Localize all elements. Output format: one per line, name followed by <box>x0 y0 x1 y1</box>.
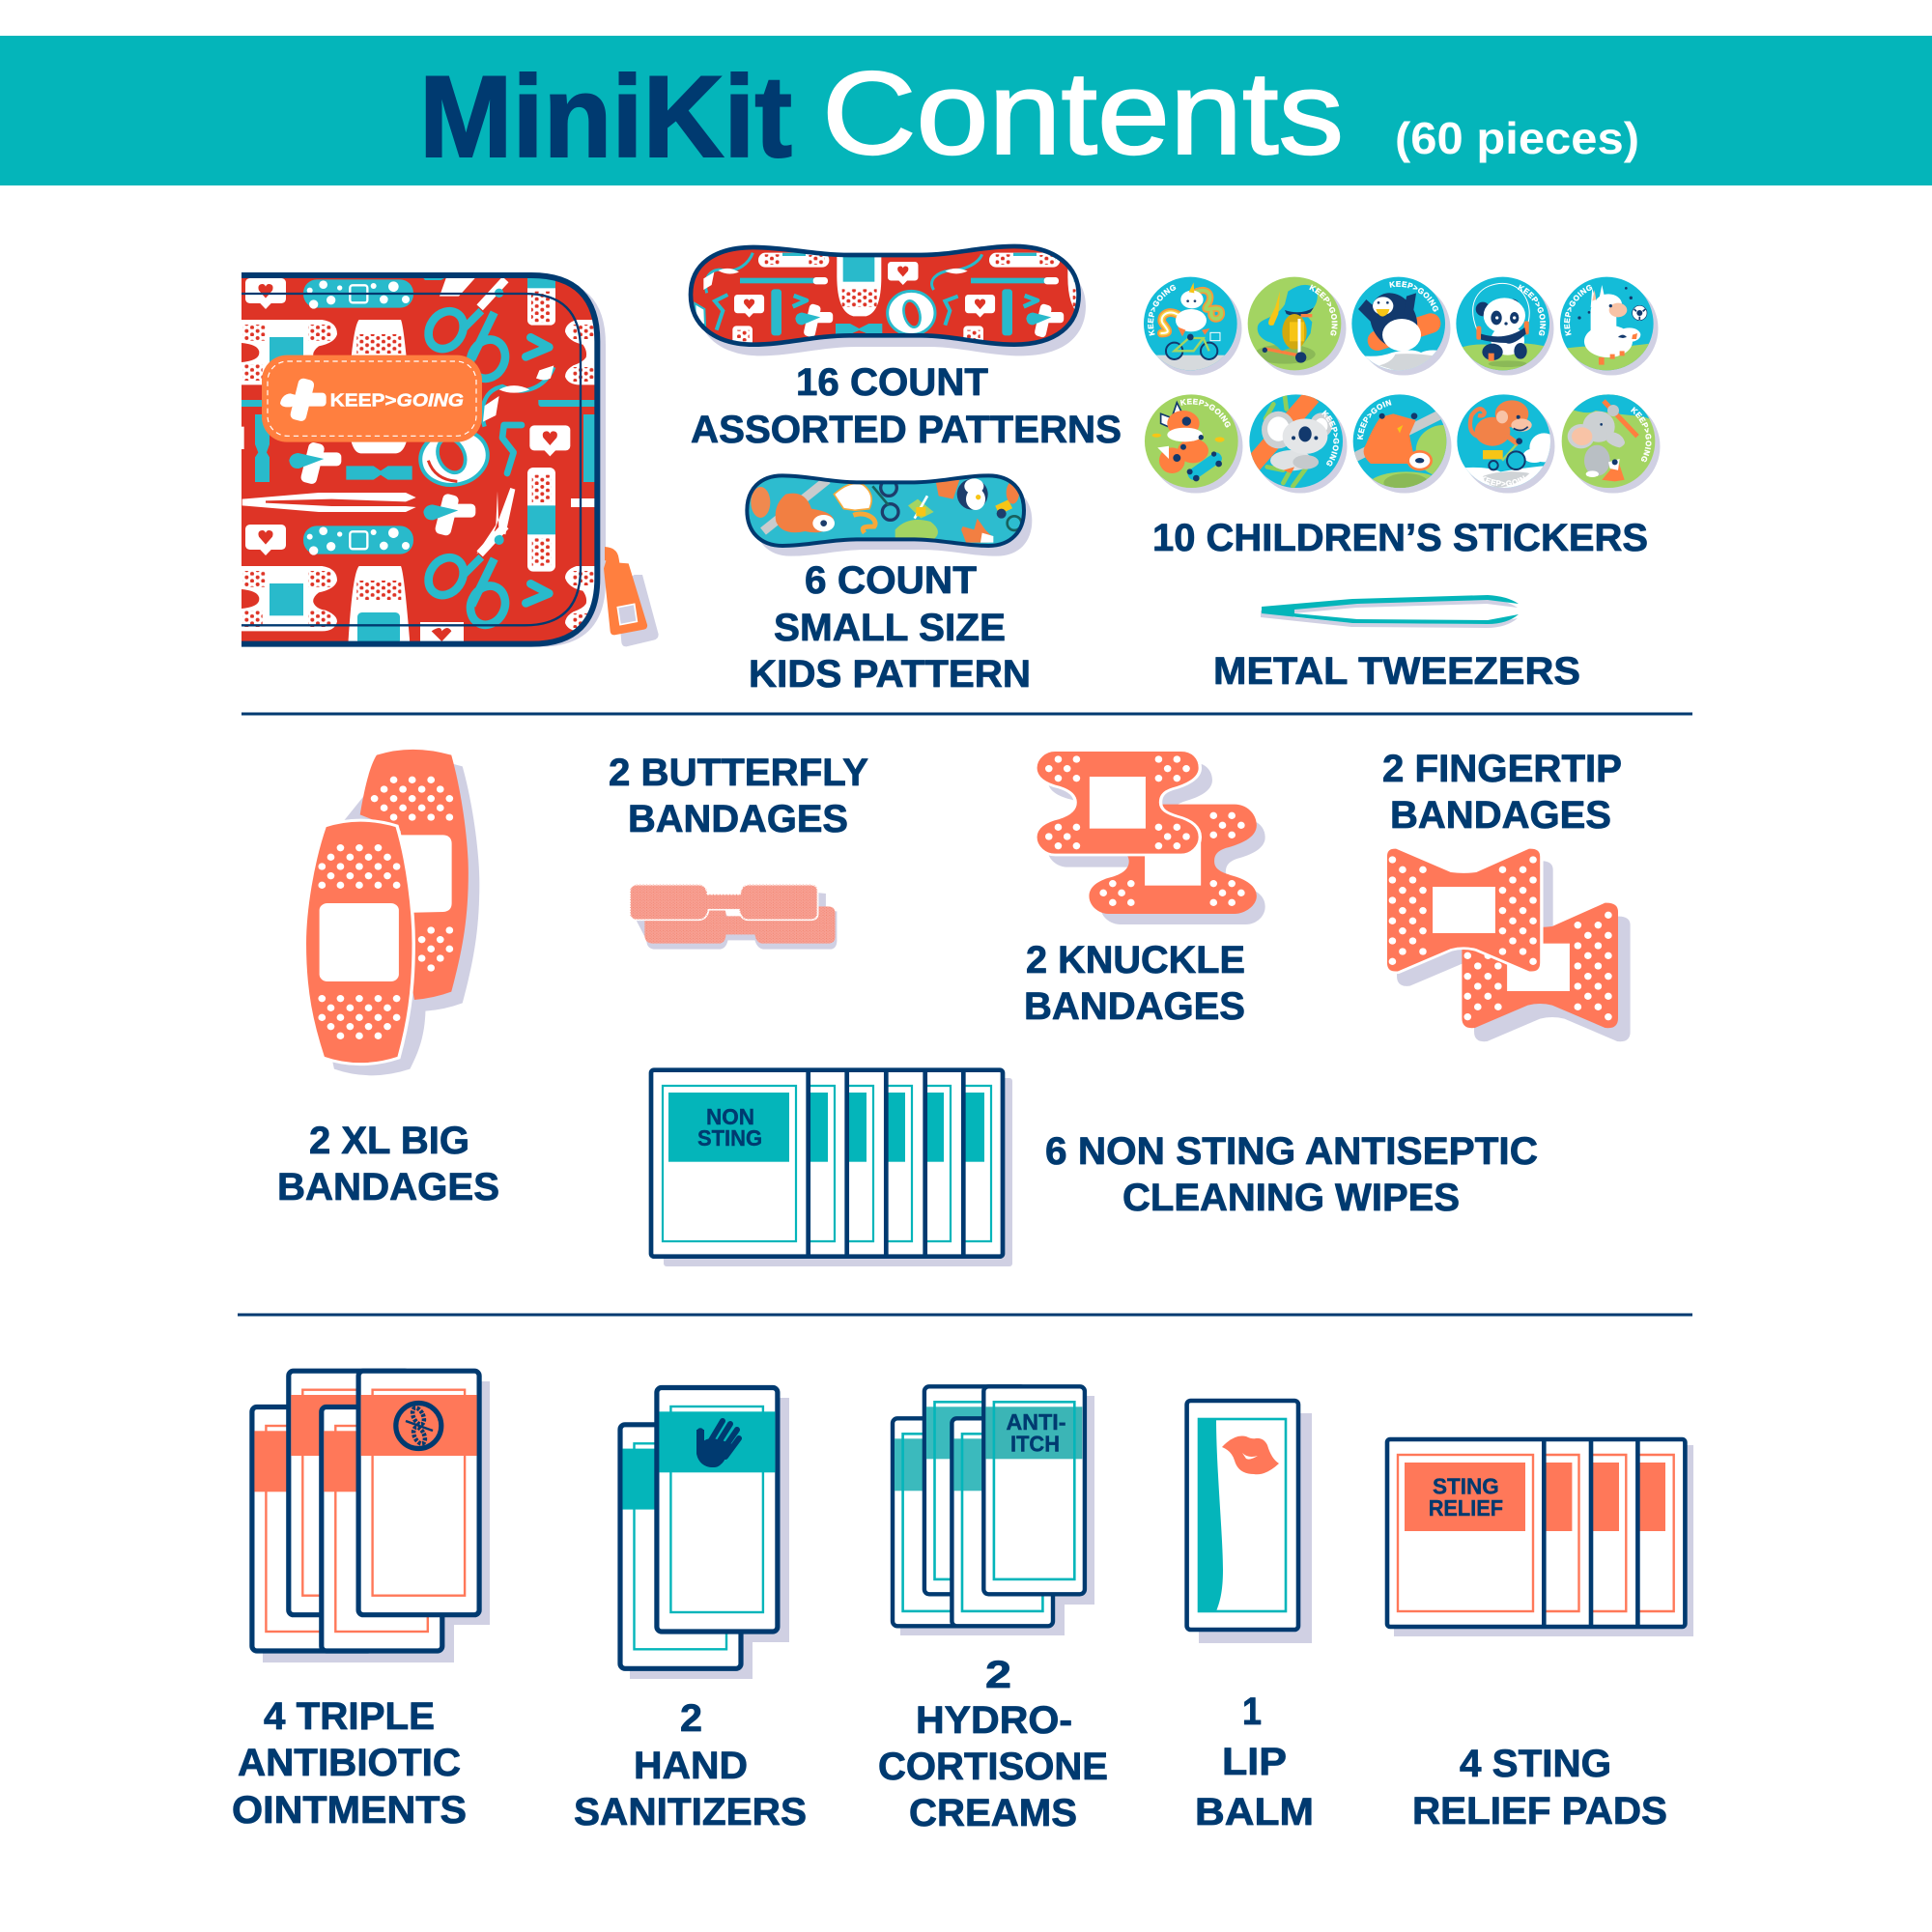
sticker: dinosaur on scooter <box>1248 276 1341 371</box>
icon: crossed out bacteria <box>396 1403 441 1449</box>
stickers <box>1144 276 1660 493</box>
sticker: monkey on tricycle <box>1457 394 1550 488</box>
title: MiniKit: MiniKit <box>419 52 792 182</box>
label: knuckle bandages: 2 KNUCKLE <box>1026 939 1245 981</box>
anti-itch text: ITCH <box>1010 1432 1060 1457</box>
anti-itch text: ANTI- <box>1007 1409 1066 1435</box>
sticker: unicorn on bike <box>1144 276 1237 371</box>
cream shadows <box>900 1396 1094 1635</box>
wipes text <box>697 1104 762 1151</box>
kids bandage shadow <box>755 486 1032 556</box>
label: XL bandages <box>277 1120 499 1208</box>
label: lip balm <box>1195 1690 1314 1833</box>
banner background <box>0 36 1932 185</box>
label: hydrocortisone: CORTISONE <box>878 1746 1108 1788</box>
front XL bandage <box>304 820 413 1065</box>
pouch outline <box>242 275 597 644</box>
label: XL bandages: 2 XL BIG <box>309 1120 469 1162</box>
fingertip shadows <box>1397 861 1631 1041</box>
label: 16 count: ASSORTED PATTERNS <box>691 409 1122 451</box>
kids bandage outline <box>747 475 1024 546</box>
ointment shadows <box>263 1381 490 1662</box>
pull shadow <box>616 575 659 646</box>
label: tweezers: METAL TWEEZERS <box>1213 650 1580 693</box>
zipper pull <box>604 547 659 646</box>
sticker: llama with soccer ball: KEEP>GOING <box>1564 284 1592 336</box>
label: wipes: 6 NON STING ANTISEPTIC <box>1045 1130 1538 1173</box>
tweezers shadow <box>1261 599 1518 628</box>
label: 6 count kids <box>749 559 1031 696</box>
label: ointments <box>232 1695 467 1832</box>
tweezers body <box>1262 595 1519 624</box>
ointment packet front <box>358 1371 479 1615</box>
sticker: fox on skateboard <box>1144 394 1238 488</box>
label: knuckle bandages <box>1024 939 1245 1028</box>
label: butterfly bandages: BANDAGES <box>628 798 848 840</box>
lip balm shadow <box>1199 1413 1312 1643</box>
logo cross <box>280 378 327 422</box>
sanitizer packet back <box>620 1425 741 1668</box>
label: wipes <box>1045 1130 1538 1219</box>
sticker: penguin on snowboard <box>1351 276 1445 371</box>
label: fingertip bandages: BANDAGES <box>1390 794 1611 837</box>
butterfly shadow <box>637 911 837 950</box>
kids bandage pattern <box>749 477 1022 544</box>
label: 6 count kids: 6 COUNT <box>805 559 977 602</box>
sting relief text: STING <box>1433 1474 1499 1499</box>
icon: lip balm <box>1187 1401 1312 1643</box>
pouch pattern <box>242 278 595 641</box>
label: hydrocortisone: HYDRO- <box>916 1699 1072 1742</box>
label: sting relief <box>1412 1743 1667 1833</box>
label: 6 count kids: SMALL SIZE <box>774 607 1006 649</box>
cream packet front left <box>952 1418 1053 1626</box>
sticker: sloth hanging on branch: KEEP>GOING <box>1356 400 1391 440</box>
back XL bandage <box>360 750 469 1000</box>
icon: hand sanitizers <box>620 1387 789 1679</box>
pads background <box>1387 1439 1685 1627</box>
sticker: koala on branch: KEEP>GOING <box>1321 410 1339 467</box>
pouch with bandage pattern <box>242 272 659 647</box>
ointment packet rear left <box>252 1406 373 1651</box>
label: hydrocortisone: 2 <box>985 1654 1011 1696</box>
label: lip balm: 1 <box>1242 1690 1262 1733</box>
title: Contents: Contents <box>822 47 1344 179</box>
icon: knuckle bandages <box>1036 751 1265 924</box>
pads outlines <box>1387 1439 1685 1628</box>
bandage pattern <box>693 248 1076 342</box>
pads inner outlines <box>1398 1455 1674 1611</box>
sticker: koala on branch <box>1249 394 1343 488</box>
label: fingertip bandages: 2 FINGERTIP <box>1382 748 1622 790</box>
sanitizer shadows <box>630 1398 789 1679</box>
sticker: unicorn on bike: KEEP>GOING <box>1148 284 1177 336</box>
lip balm inner outline <box>1199 1419 1286 1611</box>
cream packet front <box>983 1386 1085 1594</box>
pull hole <box>617 604 637 625</box>
sticker: sloth hanging on branch <box>1352 394 1447 488</box>
label: ointments: ANTIBIOTIC <box>238 1742 461 1784</box>
label stitching <box>268 361 476 436</box>
sticker: fox on skateboard: KEEP>GOING <box>1180 398 1231 428</box>
sanitizer packet front <box>657 1387 778 1632</box>
label: 16 count: 16 COUNT <box>796 361 988 404</box>
label: butterfly bandages: 2 BUTTERFLY <box>609 752 868 794</box>
sting relief text <box>1429 1474 1503 1520</box>
sticker: elephant: KEEP>GOING <box>1631 407 1652 462</box>
sticker: llama with soccer ball <box>1559 276 1654 371</box>
label: hand sanitizers <box>574 1697 807 1833</box>
title: piece count: (60 pieces) <box>1395 113 1639 163</box>
sticker: dinosaur on scooter: KEEP>GOING <box>1309 284 1338 336</box>
label: stickers: 10 CHILDREN’S STICKERS <box>1152 517 1648 559</box>
sticker: monkey on tricycle: KEEP>GOING <box>1482 475 1524 487</box>
lip balm packet <box>1187 1401 1298 1630</box>
lip balm teal band <box>1198 1418 1223 1611</box>
sticker: penguin on snowboard: KEEP>GOING <box>1389 281 1438 312</box>
wipes shadow <box>664 1078 1012 1266</box>
label: fingertip bandages <box>1382 748 1622 837</box>
sticker shadows <box>1148 282 1660 493</box>
XL bandage shadows <box>327 760 479 1075</box>
icon: fingertip bandages <box>1385 847 1631 1041</box>
kids pattern bandage <box>741 470 1032 556</box>
orange logo label <box>262 355 482 442</box>
icon: sting relief pads <box>1387 1439 1693 1636</box>
label: butterfly bandages <box>609 752 868 840</box>
icon: hand <box>696 1421 739 1467</box>
front butterfly bandage <box>630 885 817 920</box>
sticker: elephant <box>1561 394 1656 488</box>
sticker: panda jumping rope: KEEP>GOING <box>1518 284 1546 336</box>
sticker: panda jumping rope <box>1456 276 1549 371</box>
wipes text: STING <box>697 1125 762 1151</box>
back butterfly bandage <box>644 906 835 944</box>
ointment packet front left <box>322 1406 442 1651</box>
label: hydrocortisone: CREAMS <box>909 1792 1077 1834</box>
icon: XL bandages <box>304 750 479 1075</box>
front fingertip bandage <box>1385 847 1542 973</box>
pouch stitching <box>242 294 581 625</box>
label: knuckle bandages: BANDAGES <box>1024 985 1245 1028</box>
label: hand sanitizers: SANITIZERS <box>574 1791 807 1833</box>
label: sting relief: 4 STING <box>1460 1743 1611 1785</box>
knuckle shadows <box>1048 762 1265 924</box>
ointment packet back top <box>289 1371 410 1615</box>
brand text: KEEP>GOING <box>330 390 464 411</box>
wipes outlines <box>651 1070 1003 1257</box>
label: hand sanitizers: HAND <box>634 1745 748 1787</box>
icon: antiseptic wipes <box>651 1070 1012 1266</box>
icon: hydrocortisone creams <box>893 1386 1094 1635</box>
icon: metal tweezers <box>1261 595 1519 628</box>
wipes packets background <box>651 1070 1003 1257</box>
front knuckle bandage <box>1036 751 1200 855</box>
pads shadow <box>1394 1445 1693 1636</box>
icon: butterfly bandages <box>630 885 837 950</box>
icon: antibiotic ointments <box>252 1371 490 1662</box>
large red bandage <box>688 243 1086 355</box>
label: hydrocortisone <box>878 1654 1108 1834</box>
bandage shadow <box>697 258 1086 355</box>
label: ointments: 4 TRIPLE <box>264 1695 435 1738</box>
icon: lips <box>1222 1435 1279 1474</box>
pouch shadow <box>250 278 606 647</box>
label body <box>262 355 482 442</box>
label: wipes: CLEANING WIPES <box>1122 1177 1460 1219</box>
anti-itch text <box>1007 1409 1066 1457</box>
wipes inner outlines and bands <box>663 1086 991 1241</box>
back knuckle bandage <box>1089 805 1257 914</box>
sting relief text: RELIEF <box>1429 1495 1503 1520</box>
wipes text: NON <box>706 1104 754 1129</box>
cream packet back top <box>924 1386 1026 1594</box>
label: 16 count <box>691 361 1122 451</box>
pads bands <box>1405 1463 1665 1531</box>
back fingertip bandage <box>1462 903 1618 1028</box>
banner <box>0 36 1932 185</box>
label: lip balm: LIP <box>1222 1741 1287 1783</box>
label: 6 count kids: KIDS PATTERN <box>749 653 1031 696</box>
bandage outline <box>691 246 1079 345</box>
label: lip balm: BALM <box>1195 1791 1314 1833</box>
label: ointments: OINTMENTS <box>232 1789 467 1832</box>
pull body <box>604 547 647 635</box>
label: sting relief: RELIEF PADS <box>1412 1790 1667 1833</box>
cream packet rear left <box>893 1418 994 1626</box>
label: hand sanitizers: 2 <box>680 1697 702 1740</box>
label: XL bandages: BANDAGES <box>277 1166 499 1208</box>
